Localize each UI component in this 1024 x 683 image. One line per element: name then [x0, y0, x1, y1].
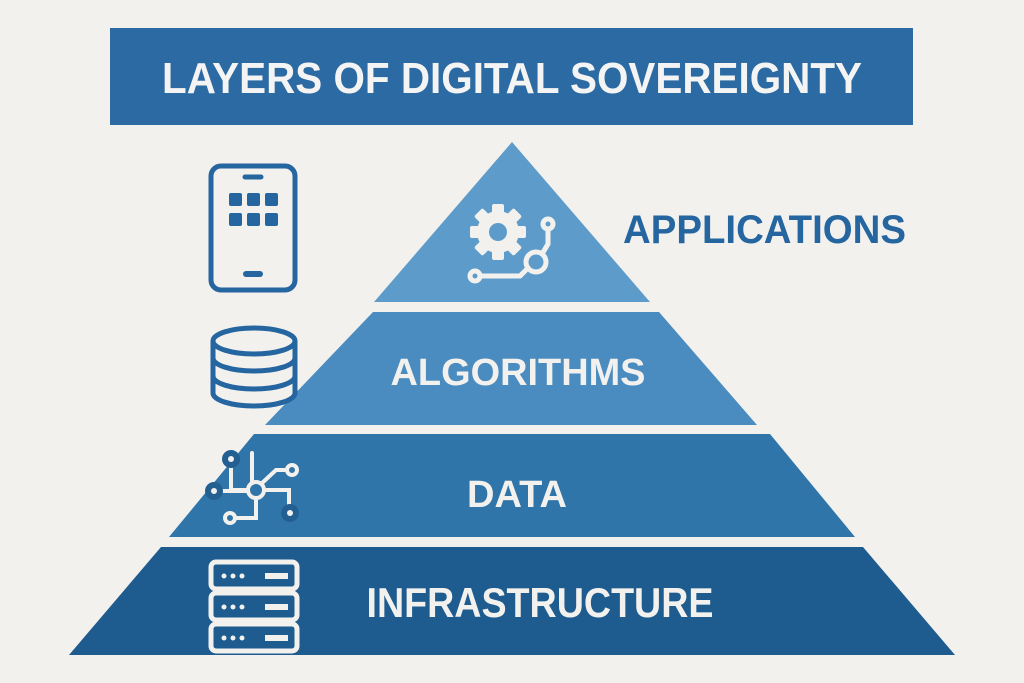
icon: phone [211, 166, 295, 290]
tier: data [169, 434, 855, 537]
icon: gear with circuit [470, 204, 553, 281]
tier: infrastructure: INFRASTRUCTURE [366, 579, 714, 626]
title banner: LAYERS OF DIGITAL SOVEREIGNTY [162, 54, 862, 103]
tier: infrastructure [69, 547, 955, 655]
tier: applications [374, 142, 650, 302]
tier: data: DATA [467, 474, 567, 516]
tier: algorithms [265, 312, 757, 425]
icon: database [213, 328, 295, 406]
icon: server stack [211, 562, 297, 651]
tier: algorithms: ALGORITHMS [390, 352, 646, 394]
label: applications: APPLICATIONS [623, 208, 906, 252]
title banner [110, 28, 913, 125]
icon: data network [205, 450, 299, 523]
